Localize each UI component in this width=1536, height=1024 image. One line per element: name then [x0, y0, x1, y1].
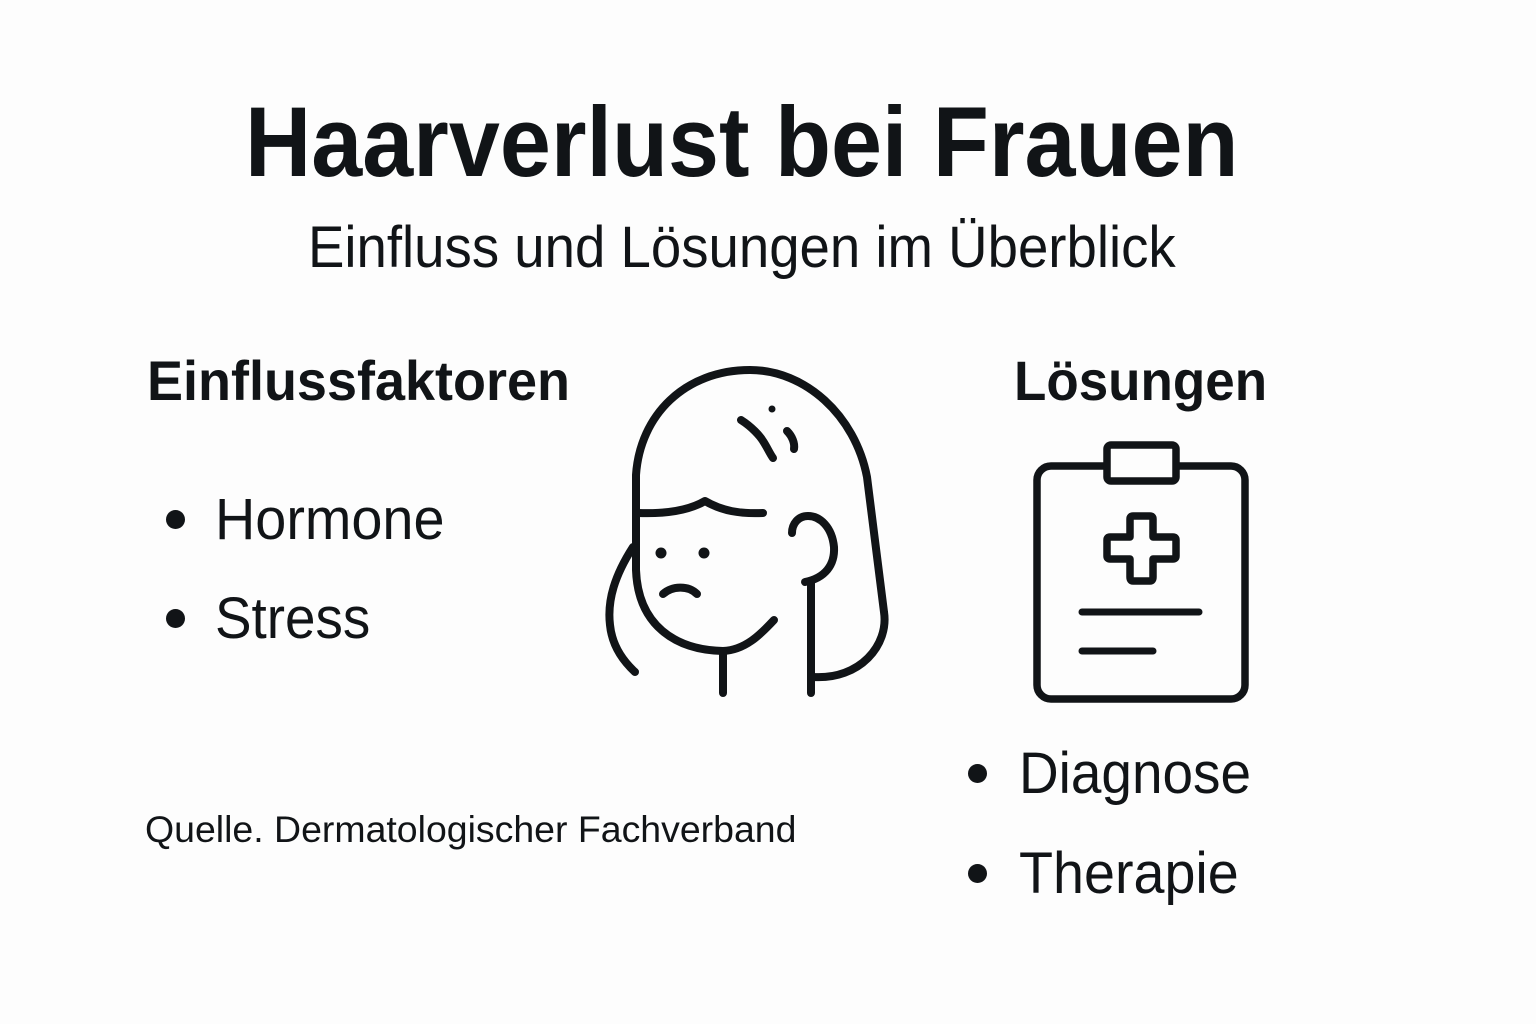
source note: Quelle. Dermatologischer Fachverband — [145, 809, 796, 850]
bullet: Therapie: Therapie — [1019, 841, 1239, 906]
bullet: Hormone: Hormone — [215, 487, 444, 552]
subtitle: Einfluss und Lösungen im Überblick — [308, 215, 1176, 280]
list: solutions — [968, 741, 1251, 906]
bullet: Diagnose: Diagnose — [1019, 741, 1251, 806]
list: influencing factors — [166, 487, 444, 651]
heading: Lösungen: Lösungen — [1014, 349, 1267, 412]
heading: Einflussfaktoren: Einflussfaktoren — [147, 349, 570, 412]
bullet: Stress: Stress — [215, 586, 370, 651]
title: Haarverlust bei Frauen — [245, 86, 1239, 197]
